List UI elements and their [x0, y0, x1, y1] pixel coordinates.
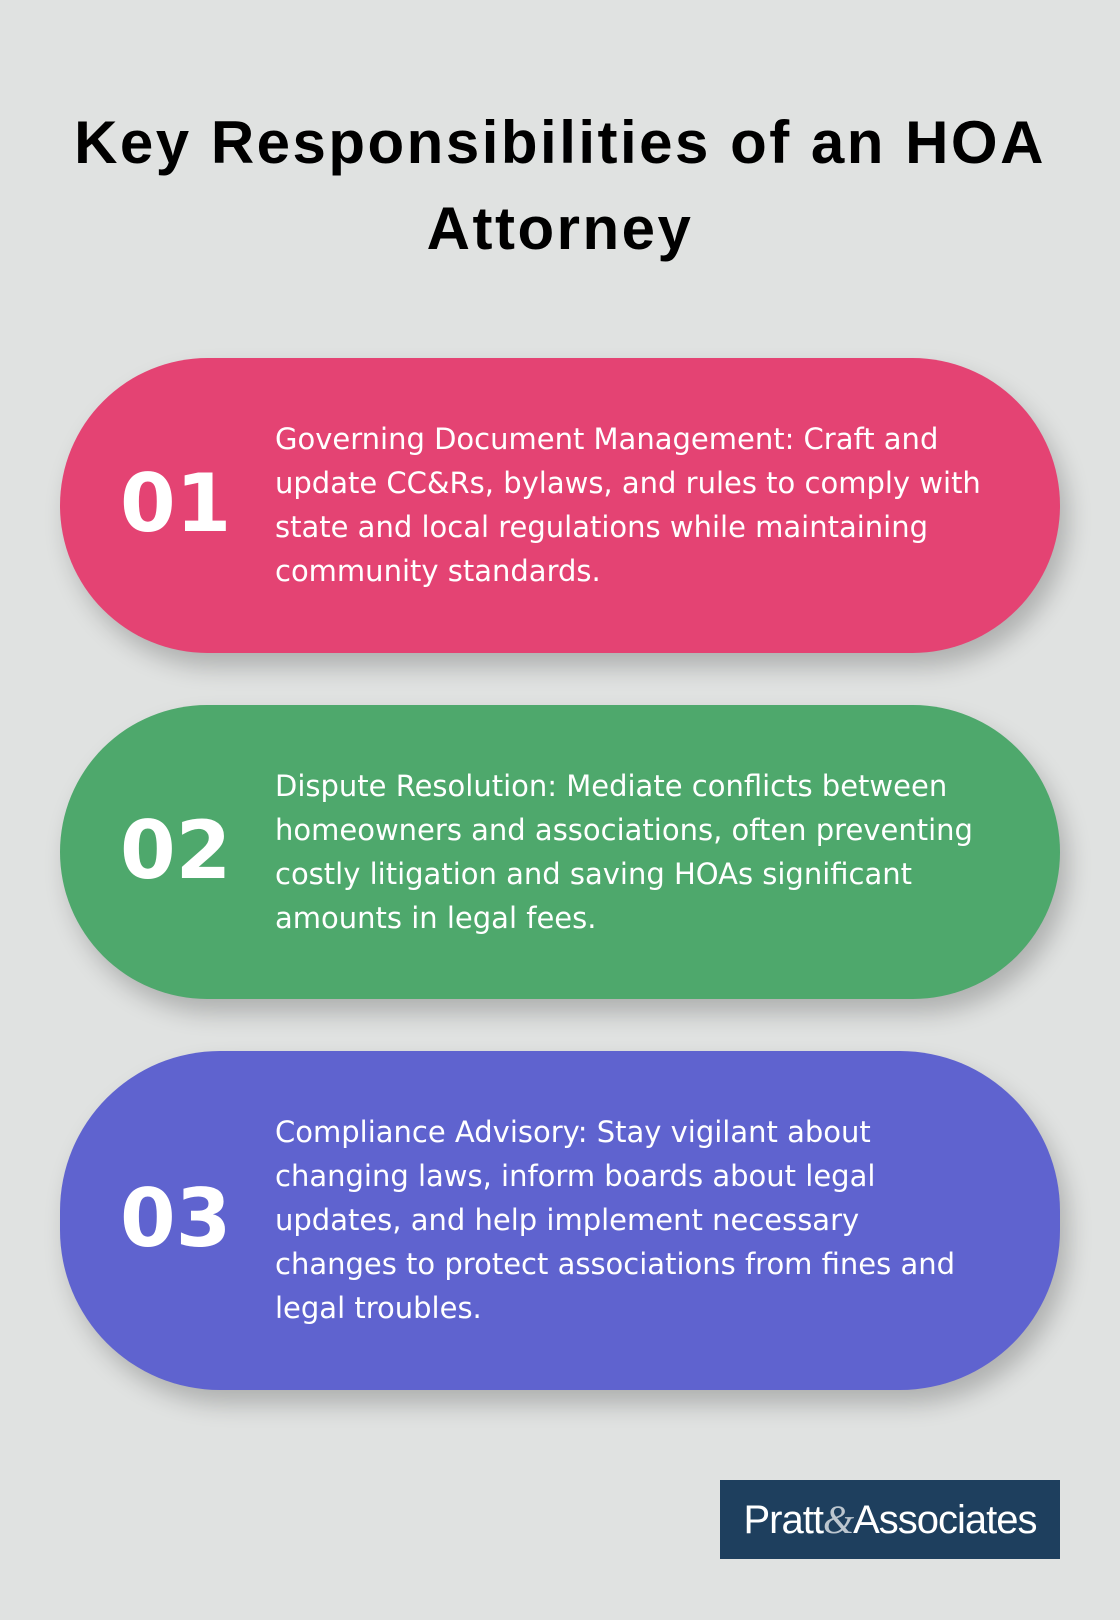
title: [74, 109, 1046, 262]
text 02: amounts in legal fees.: [275, 901, 596, 935]
number 01: 01: [120, 457, 231, 550]
text 03: changing laws, inform boards about legal: [275, 1159, 875, 1193]
text 03: updates, and help implement necessary: [275, 1203, 859, 1237]
text 02: [275, 769, 973, 935]
logo: Pratt&Associates: [743, 1497, 1037, 1542]
text 01: [275, 422, 981, 588]
text 03: Compliance Advisory: Stay vigilant about: [275, 1115, 871, 1149]
number 02: 02: [120, 804, 231, 897]
text 02: Dispute Resolution: Mediate conflicts between: [275, 769, 947, 803]
text 01: Governing Document Management: Craft and: [275, 422, 938, 456]
text 02: homeowners and associations, often preventing: [275, 813, 973, 847]
title: Key Responsibilities of an HOA: [74, 109, 1046, 176]
text 01: state and local regulations while maintaining: [275, 510, 928, 544]
text 02: costly litigation and saving HOAs significant: [275, 857, 912, 891]
text 03: legal troubles.: [275, 1291, 482, 1325]
panel: 03: [60, 1051, 1060, 1390]
text 01: update CC&Rs, bylaws, and rules to comply with: [275, 466, 981, 500]
text 03: changes to protect associations from fines and: [275, 1247, 955, 1281]
logo: [720, 1480, 1060, 1559]
panel: 01: [60, 358, 1060, 653]
text 01: community standards.: [275, 554, 601, 588]
number 03: 03: [120, 1172, 231, 1265]
panel: 02: [60, 705, 1060, 999]
title: Attorney: [427, 195, 693, 262]
text 03: [275, 1115, 955, 1325]
